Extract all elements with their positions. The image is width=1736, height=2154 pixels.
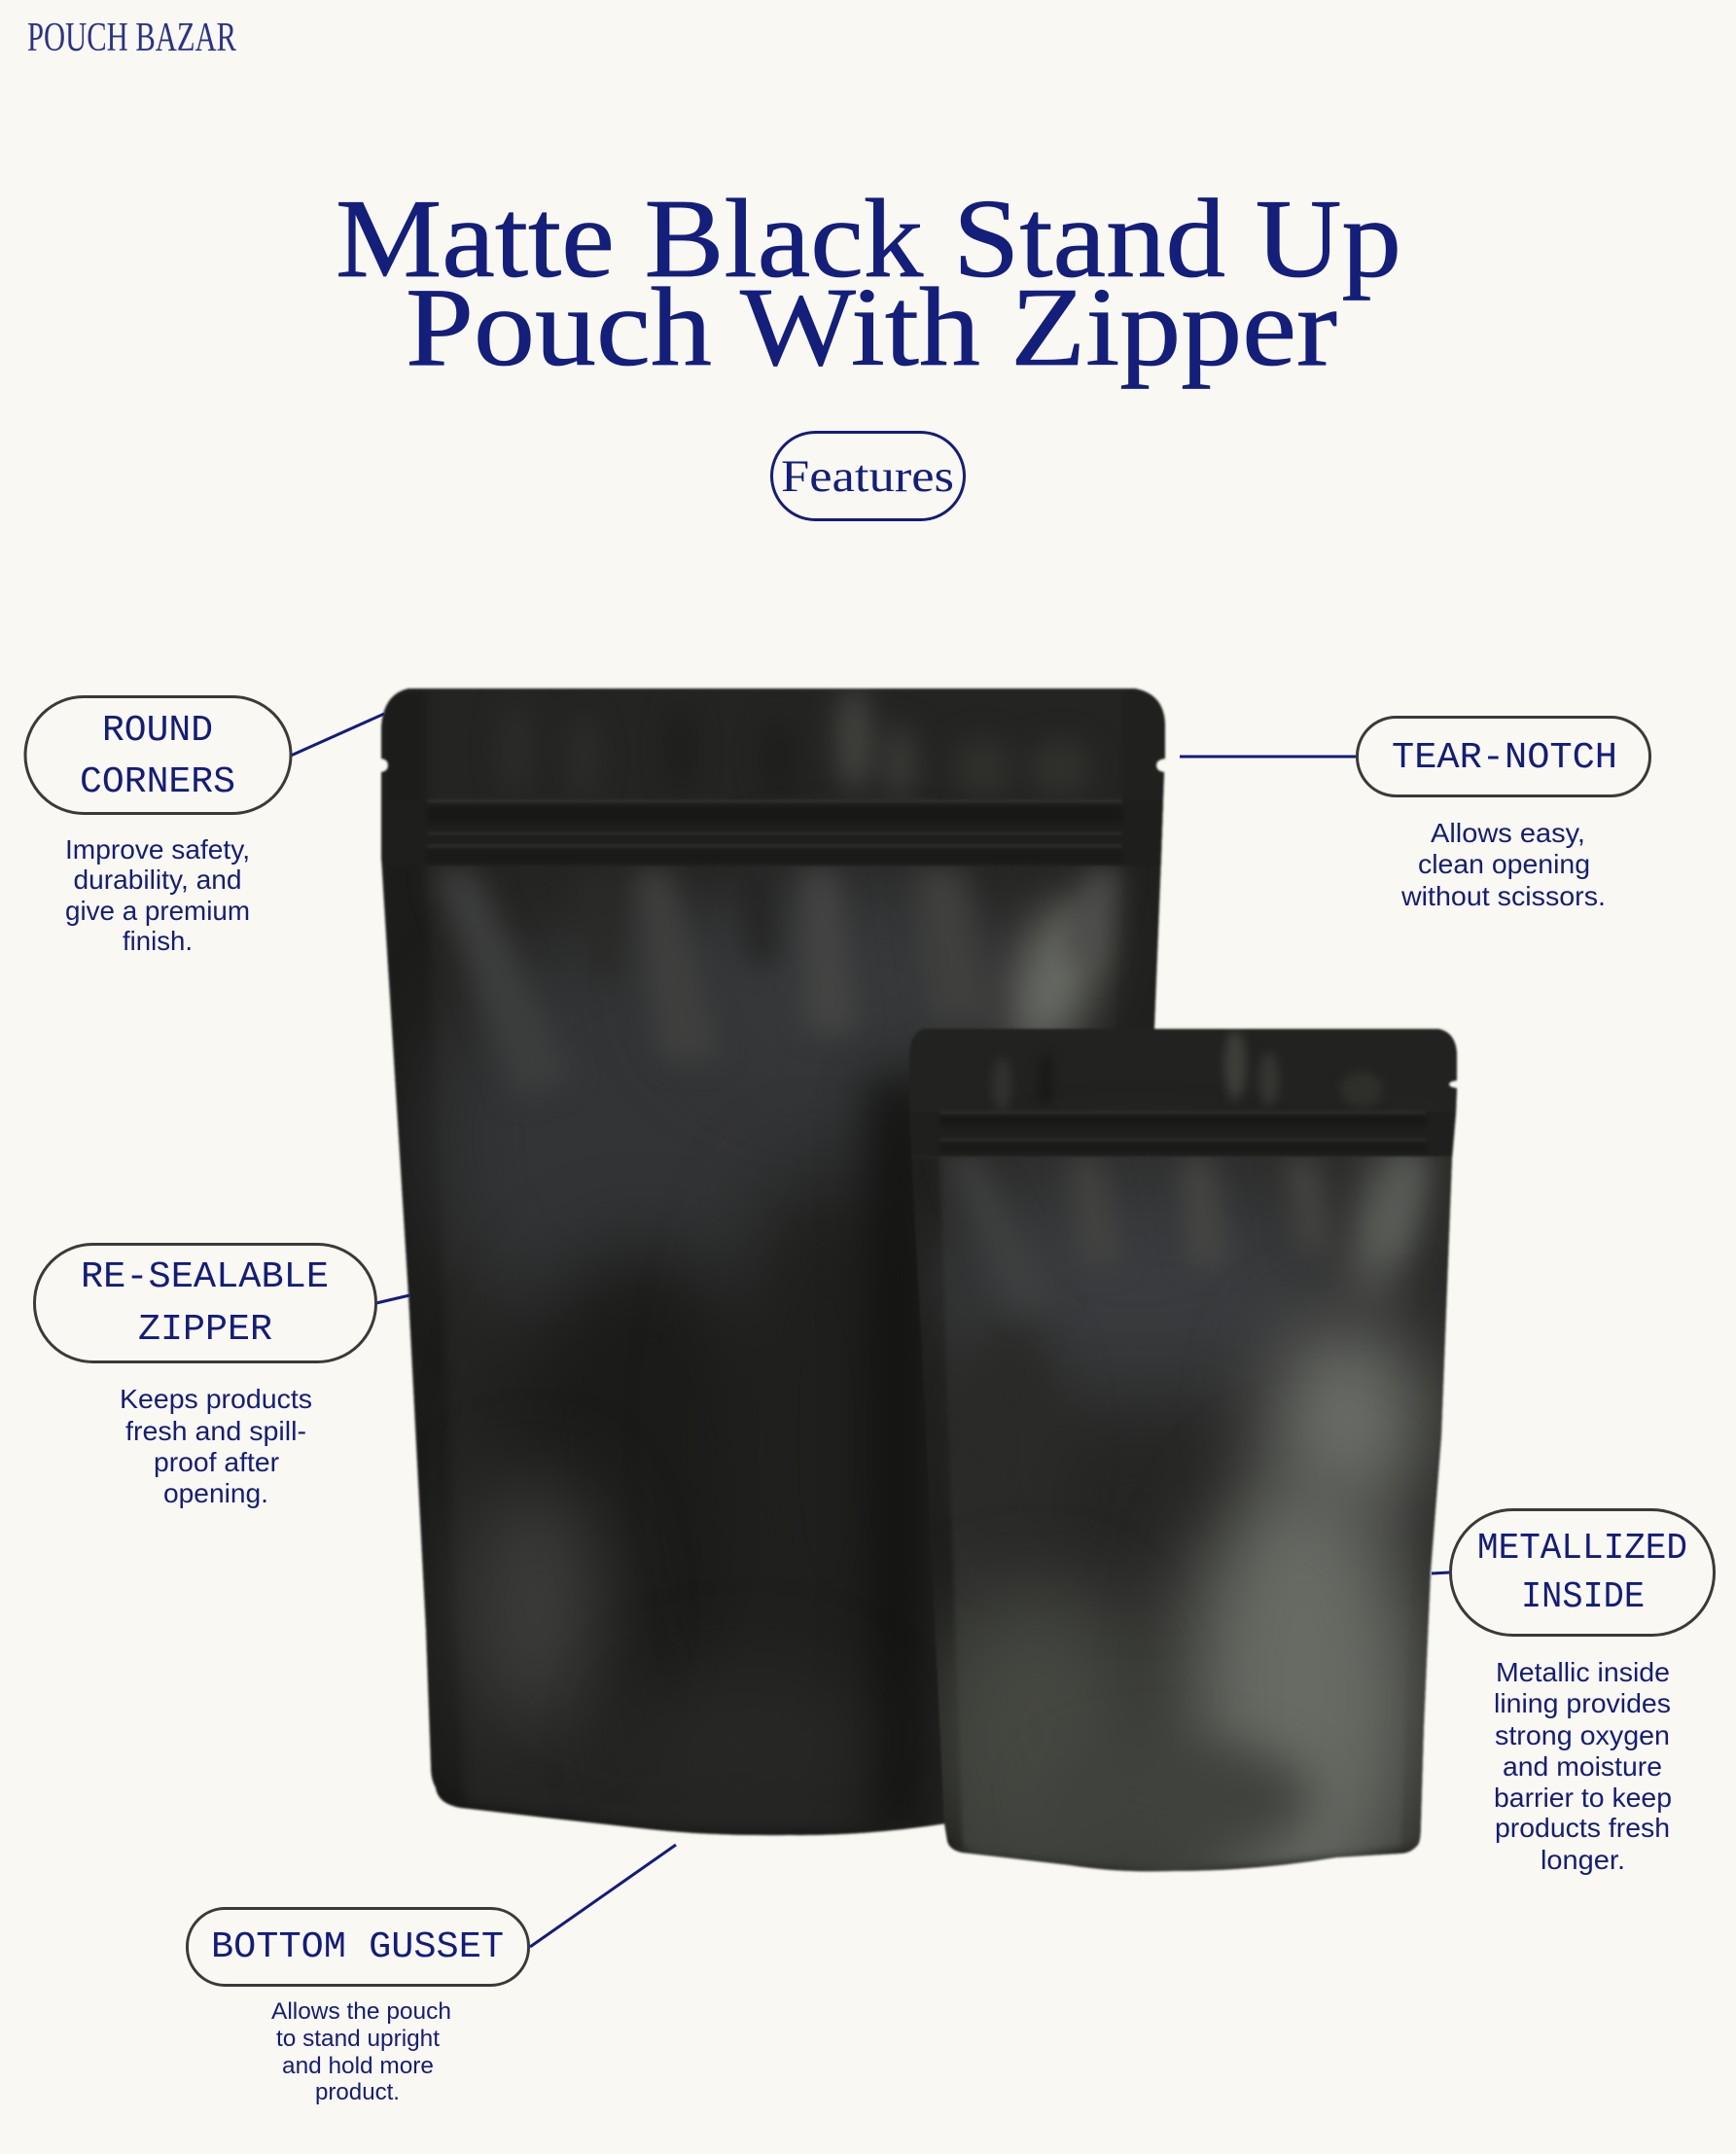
small pouch	[900, 1021, 1464, 1916]
description: longer.	[1541, 1845, 1625, 1875]
description: finish.	[123, 926, 193, 956]
description: to stand upright	[276, 2026, 440, 2052]
connector	[1180, 755, 1358, 759]
description: barrier to keep	[1494, 1783, 1672, 1813]
description: give a premium	[65, 896, 250, 926]
description: without scissors.	[1400, 881, 1606, 911]
description	[120, 1384, 312, 1508]
pill	[1358, 718, 1649, 795]
description: and moisture	[1503, 1751, 1662, 1782]
callout: re-sealable zipper	[35, 1245, 409, 1508]
connector	[530, 1845, 676, 1947]
description: products fresh	[1495, 1813, 1670, 1843]
title: Matte Black Stand Up	[336, 177, 1401, 301]
pill: ZIPPER	[138, 1309, 272, 1351]
pill: INSIDE	[1521, 1576, 1645, 1618]
connector	[291, 714, 384, 756]
pill	[187, 1908, 529, 1986]
pill	[25, 696, 291, 813]
description	[1400, 818, 1606, 911]
pill: BOTTOM GUSSET	[211, 1926, 504, 1968]
pill	[35, 1245, 375, 1361]
callout: bottom gusset	[187, 1845, 676, 2105]
description: strong oxygen	[1495, 1720, 1670, 1750]
description	[271, 1998, 451, 2105]
description: durability, and	[74, 865, 241, 895]
description: and hold more	[282, 2053, 434, 2079]
pill: TEAR-NOTCH	[1392, 737, 1617, 779]
features badge	[772, 432, 965, 519]
features badge: Features	[781, 451, 954, 502]
description: proof after	[154, 1447, 279, 1477]
title: Pouch With Zipper	[406, 265, 1337, 390]
description: clean opening	[1418, 849, 1590, 879]
callout: metallized inside	[1432, 1509, 1714, 1875]
callout: tear-notch	[1180, 718, 1649, 911]
large pouch	[370, 681, 1177, 1848]
description: fresh and spill-	[125, 1416, 306, 1446]
connector	[376, 1295, 409, 1303]
description: Allows easy,	[1431, 818, 1585, 848]
description: product.	[315, 2079, 400, 2105]
description	[65, 834, 250, 956]
description: Improve safety,	[65, 834, 250, 865]
pill: METALLIZED	[1477, 1528, 1687, 1570]
description: opening.	[163, 1478, 268, 1508]
pill: CORNERS	[80, 761, 235, 803]
callout: round corners	[25, 696, 384, 956]
description: Keeps products	[120, 1384, 312, 1414]
pill: RE-SEALABLE	[81, 1256, 329, 1298]
large pouch zipper	[381, 800, 1165, 865]
connector	[1432, 1572, 1450, 1573]
pill: ROUND	[102, 710, 213, 752]
pill	[1451, 1509, 1714, 1636]
description	[1494, 1657, 1672, 1875]
title	[336, 177, 1401, 390]
description: lining provides	[1494, 1688, 1671, 1718]
logo: POUCH BAZAR	[27, 16, 236, 60]
description: Allows the pouch	[271, 1998, 451, 2025]
small pouch zipper	[909, 1112, 1457, 1156]
description: Metallic inside	[1496, 1657, 1670, 1687]
